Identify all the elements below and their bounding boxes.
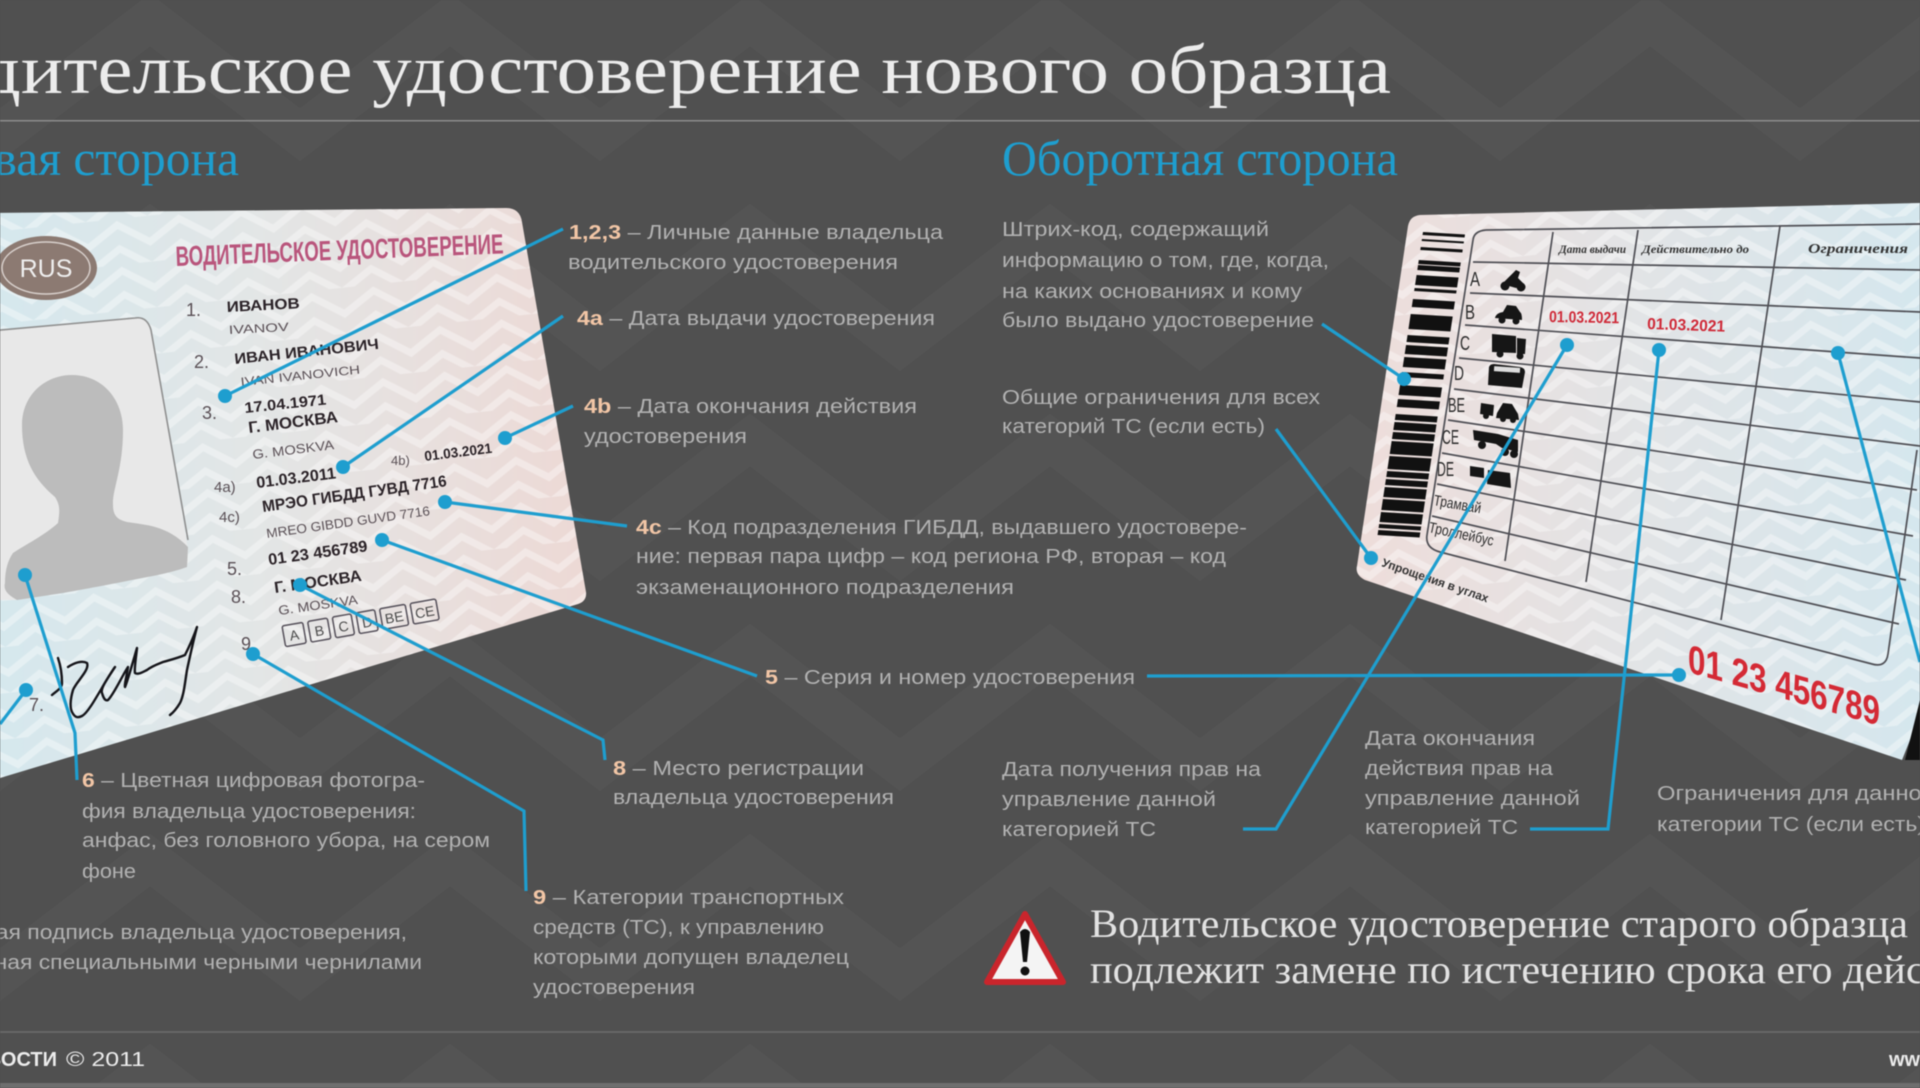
text: date expiry: действия прав на bbox=[1365, 758, 1554, 780]
text: barcode description: на каких основаниях и кому bbox=[1002, 281, 1302, 303]
card data fields: 4c) bbox=[219, 509, 240, 526]
text: item 9: 9 – Категории транспортных bbox=[533, 887, 844, 909]
text: general restrictions: категорий ТС (если есть) bbox=[1002, 416, 1265, 438]
card data fields: 7. bbox=[29, 695, 44, 715]
card data fields: 9. bbox=[241, 634, 256, 654]
text: item 8 bbox=[613, 758, 894, 809]
text: item 6: фоне bbox=[82, 861, 136, 883]
issue and expiry dates: 01.03.2021 bbox=[1647, 316, 1726, 336]
category boxes: BE bbox=[384, 608, 405, 627]
text: general restrictions: Общие ограничения для всех bbox=[1002, 387, 1320, 409]
text: item 4c bbox=[636, 517, 1247, 599]
table category letters bbox=[1427, 269, 1496, 550]
card data fields: 8. bbox=[231, 587, 246, 607]
card data fields: MREO GIBDD GUVD 7716 bbox=[265, 503, 431, 541]
table headers: Действительно до bbox=[1641, 242, 1749, 256]
card data fields: МРЭО ГИБДД ГУВД 7716 bbox=[261, 473, 448, 516]
panel: back of licence card bbox=[1357, 203, 1920, 760]
text: date expiry bbox=[1365, 728, 1580, 839]
text: date expiry: управление данной bbox=[1365, 788, 1580, 810]
text: category restrictions: Ограничения для данной bbox=[1657, 783, 1920, 805]
heading: back side: Оборотная сторона bbox=[1002, 130, 1398, 186]
card data fields bbox=[29, 295, 493, 715]
category boxes bbox=[282, 599, 439, 647]
card data fields: Г. МОСКВА bbox=[247, 409, 339, 437]
table category letters: Трамвай bbox=[1432, 492, 1483, 517]
table category letters: DE bbox=[1437, 459, 1454, 481]
text: barcode description bbox=[1002, 219, 1329, 332]
photo placeholder bbox=[0, 318, 188, 600]
text: item 8: владельца удостоверения bbox=[613, 787, 894, 809]
table headers: Дата выдачи bbox=[1558, 242, 1626, 256]
text: item 9 bbox=[533, 887, 849, 999]
text: category restrictions bbox=[1657, 783, 1920, 836]
card data fields: 01.03.2011 bbox=[255, 465, 337, 492]
table category letters: D bbox=[1454, 363, 1464, 385]
icon: RUS oval bbox=[0, 236, 97, 300]
footer: copyright bbox=[0, 1049, 145, 1071]
table vehicle icons bbox=[1470, 270, 1526, 488]
category boxes: B bbox=[313, 622, 325, 639]
text: item 6: анфас, без головного убора, на сером bbox=[82, 830, 490, 852]
table category letters: Троллейбус bbox=[1427, 519, 1496, 550]
table category letters: CE bbox=[1442, 427, 1459, 449]
text: item 4b: 4b – Дата окончания действия bbox=[584, 396, 917, 418]
text: item 4c: ние: первая пара цифр – код региона РФ, вторая – код bbox=[636, 546, 1226, 568]
table category letters: C bbox=[1460, 333, 1470, 355]
icon: RUS oval: RUS bbox=[20, 255, 72, 283]
callout: old licence notice: Водительское удостоверение старого образца bbox=[1090, 901, 1908, 946]
category boxes: C bbox=[337, 618, 350, 635]
card data fields: G. MOSKVA bbox=[252, 437, 335, 462]
text: item 4c: 4c – Код подразделения ГИБДД, выдавшего удостовере- bbox=[636, 517, 1247, 539]
table category letters: B bbox=[1465, 302, 1475, 324]
barcode bbox=[1378, 232, 1465, 538]
text: item 9: которыми допущен владелец bbox=[533, 947, 849, 969]
card data fields: Г. МОСКВА bbox=[273, 568, 363, 597]
card data fields: 4a) bbox=[214, 479, 236, 496]
text: date obtained: Дата получения прав на bbox=[1002, 759, 1262, 781]
card data fields: 5. bbox=[227, 559, 242, 579]
text: item 5: 5 – Серия и номер удостоверения bbox=[765, 667, 1135, 689]
categories table bbox=[1427, 224, 1920, 665]
text: item 6: фия владельца удостоверения: bbox=[82, 801, 416, 823]
leader lines and dots: back bbox=[1147, 324, 1920, 829]
card data fields: 2. bbox=[194, 352, 209, 372]
table category letters: BE bbox=[1448, 395, 1465, 417]
card data fields: 01 23 456789 bbox=[267, 538, 369, 569]
callout: old licence notice bbox=[1090, 901, 1920, 992]
issue and expiry dates bbox=[1549, 309, 1726, 336]
text: date obtained: категорией ТС bbox=[1002, 819, 1156, 841]
text: item 9: удостоверения bbox=[533, 977, 695, 999]
text: item 4a: 4a – Дата выдачи удостоверения bbox=[577, 308, 935, 330]
text: items 1,2,3: водительского удостоверения bbox=[568, 252, 898, 274]
card heading: ВОДИТЕЛЬСКОЕ УДОСТОВЕРЕНИЕ bbox=[175, 228, 504, 272]
category boxes: A bbox=[288, 626, 301, 644]
text: item 7 bbox=[0, 922, 422, 974]
text: item 6 bbox=[82, 770, 490, 883]
small note on card: Упрощения в углах bbox=[1380, 556, 1491, 605]
card data fields: 17.04.1971 bbox=[244, 391, 327, 417]
table category letters: A bbox=[1470, 269, 1480, 291]
text: date obtained: управление данной bbox=[1002, 789, 1216, 811]
card data fields: 01.03.2021 bbox=[423, 440, 493, 464]
text: date expiry: Дата окончания bbox=[1365, 728, 1535, 750]
card data fields: 1. bbox=[186, 300, 201, 320]
text: items 1,2,3: 1,2,3 – Личные данные владельца bbox=[569, 222, 944, 244]
footer: copyright: © 2011 bbox=[66, 1049, 145, 1071]
text: item 6: 6 – Цветная цифровая фотогра- bbox=[82, 770, 425, 792]
text: barcode description: было выдано удостоверение bbox=[1002, 310, 1314, 332]
card data fields: ИВАНОВ bbox=[226, 295, 300, 316]
text: barcode description: информацию о том, где, когда, bbox=[1002, 250, 1329, 272]
text: category restrictions: категории ТС (если есть) bbox=[1657, 814, 1920, 836]
text: item 9: средств (ТС), к управлению bbox=[533, 917, 824, 939]
text: date expiry: категорией ТС bbox=[1365, 817, 1518, 839]
leader lines and dots: front bbox=[0, 229, 757, 891]
signature bbox=[52, 627, 197, 717]
card data fields: IVAN IVANOVICH bbox=[240, 363, 361, 389]
card data fields: G. MOSKVA bbox=[277, 592, 359, 618]
text: items 1,2,3 bbox=[568, 222, 944, 274]
text: item 8: 8 – Место регистрации bbox=[613, 758, 864, 780]
card data fields: 4b) bbox=[391, 453, 410, 468]
card data fields: 3. bbox=[202, 403, 217, 423]
category boxes: D bbox=[361, 613, 374, 631]
card data fields: ИВАН ИВАНОВИЧ bbox=[234, 336, 380, 368]
table headers bbox=[1558, 242, 1908, 257]
panel: front of licence card bbox=[0, 208, 586, 780]
text: item 4b bbox=[584, 396, 917, 448]
issue and expiry dates: 01.03.2021 bbox=[1549, 309, 1619, 327]
text: barcode description: Штрих-код, содержащий bbox=[1002, 219, 1269, 241]
text: date obtained bbox=[1002, 759, 1262, 841]
table headers: Ограничения bbox=[1808, 242, 1908, 257]
card data fields: IVANOV bbox=[228, 320, 289, 337]
icon: warning triangle bbox=[987, 914, 1063, 982]
text: general restrictions bbox=[1002, 387, 1320, 438]
category boxes: CE bbox=[414, 602, 436, 622]
text: item 4c: экзаменационного подразделения bbox=[636, 577, 1014, 599]
text: item 4b: удостоверения bbox=[584, 426, 747, 448]
